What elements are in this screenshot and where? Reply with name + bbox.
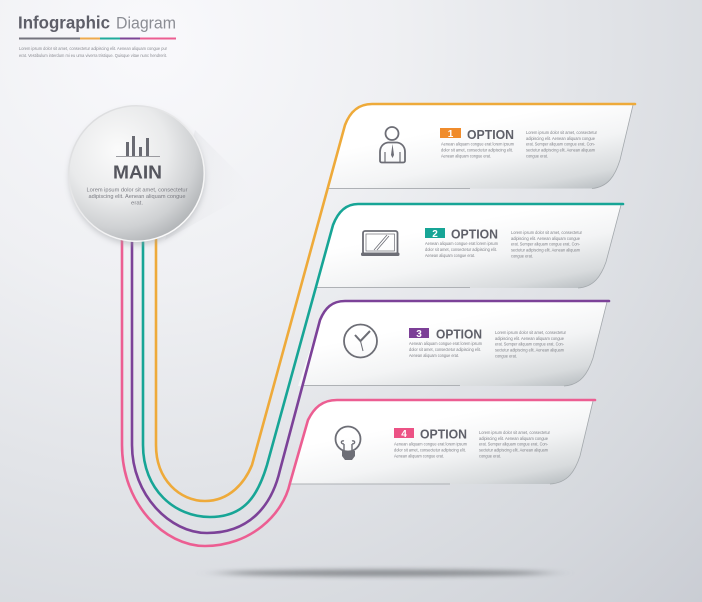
heading light word: Diagram [116,14,176,32]
sphere rim [68,105,205,242]
option 3 right text: Lorem ipsum dolor sit amet, consectetur [495,330,566,335]
badge 3: 3 [416,329,422,340]
option 1 right text: congue erat. [526,154,548,158]
option 4 right text: adipiscing elit. Aenean aliquam congue [479,436,548,441]
badge 2 [425,228,445,240]
badge 4: 4 [401,429,407,440]
connector lines [122,104,635,546]
card 1 [327,104,633,189]
card 3 right edge [564,302,607,386]
badge 3 [409,328,429,340]
option 4 right text [479,430,550,458]
option 3 heading: OPTION [436,326,482,342]
option 4 right text: Lorem ipsum dolor sit amet, consectetur [479,430,550,435]
option 2 left text: Aenean aliquam congue erat lorem ipsum [425,241,498,246]
option 4 left text [394,442,467,458]
main circle [68,105,205,245]
card 4 right edge [550,401,593,484]
option 3 left text: Aenean aliquam congue erat lorem ipsum [409,341,482,346]
option 2 right text [511,230,582,258]
option 1 left text: Aenean aliquam congue erat lorem ipsum [441,142,514,146]
panel: option 2 [314,204,621,288]
sphere [70,106,204,240]
option 4 heading: OPTION [420,426,467,442]
option 1 left text: dolor sit amet, consectetur adipiscing elit. [441,148,513,152]
card 2 [314,204,621,288]
option 2 right text: Lorem ipsum dolor sit amet, consectetur [511,230,582,235]
option 2 right text: adipiscing elit. Aenean aliquam congue [511,236,580,241]
option 3 left text: Aenean aliquam congue erat. [409,353,459,358]
orange connector [156,104,635,501]
icon: person [380,127,405,162]
option 4 left text: Aenean aliquam congue erat. [394,454,444,458]
card 2 base line [316,286,470,288]
teal connector [143,204,623,517]
main description [86,188,188,206]
sphere shadow [69,109,205,245]
purple connector [132,236,609,533]
card 3 [298,301,607,386]
ground shadow [220,570,550,576]
badge 1: 1 [448,129,454,140]
option 1 right text: erat. Semper aliquam congue erat. Con- [526,142,595,147]
option 3 right text: erat. Semper aliquam congue erat. Con- [495,342,564,347]
option 1 right text: Lorem ipsum dolor sit amet, consectetur [526,130,597,135]
long shadow of main circle [165,130,255,240]
card 1 base line [328,188,470,190]
badge 1 [440,128,461,140]
option 1 right text [526,130,597,158]
option 3 right text: congue erat. [495,354,517,358]
title colour rule [19,38,176,40]
option 3 left text: dolor sit amet, consectetur adipiscing elit. [409,347,481,352]
card 4 base line [291,483,450,485]
icon: light bulb [336,426,360,460]
option 4 right text: congue erat. [479,454,501,458]
title block [18,12,176,58]
option 1 heading: OPTION [467,127,514,142]
card 3 base line [303,384,460,386]
option 2 right text: sectetur adipiscing elit. Aenean aliquam [511,247,580,252]
title description: Lorem ipsum dolor sit amet, consectetur adipiscing elit. Aenean aliquam congue pur [19,46,168,51]
option 2 right text: erat. Semper aliquam congue erat. Con- [511,242,580,247]
option 4 right text: sectetur adipiscing elit. Aenean aliquam [479,447,548,452]
option 1 left text [441,142,514,158]
main description: Lorem ipsum dolor sit amet, consectetur [86,188,188,194]
title description [19,46,168,58]
badge 2: 2 [432,229,438,240]
panel: option 4 [289,400,593,484]
badge 4 [394,428,414,440]
option 3 right text: sectetur adipiscing elit. Aenean aliquam [495,347,564,352]
pink connector [122,236,595,546]
option 3 right text: adipiscing elit. Aenean aliquam congue [495,336,564,341]
main description: erat. [131,200,143,206]
title description: erat. Vestibulum interdum mi eu urna viverra tristique. Quisque vitae nunc hendrerit. [19,53,167,58]
panel: option 3 [298,301,607,386]
option 3 left text [409,341,482,358]
option 2 left text [425,241,498,258]
icon: clock [344,324,377,358]
option 1 right text: adipiscing elit. Aenean aliquam congue [526,136,595,141]
option 4 left text: Aenean aliquam congue erat lorem ipsum [394,442,467,446]
option 4 right text: erat. Semper aliquam congue erat. Con- [479,442,548,447]
card 1 right edge [592,105,633,188]
icon: laptop [361,231,400,256]
option 2 right text: congue erat. [511,254,533,258]
heading: Infographic [18,12,110,32]
card 2 right edge [578,205,621,288]
option 1 left text: Aenean aliquam congue erat. [441,154,491,158]
icon: bar chart [116,136,160,157]
main label: MAIN [113,162,162,182]
card 4 [289,400,593,484]
panel: option 1 [327,104,633,189]
option 4 left text: dolor sit amet, consectetur adipiscing elit. [394,448,466,452]
main description: adipiscing elit. Aenean aliquam congue [88,194,186,200]
option 3 right text [495,330,566,358]
option 1 right text: sectetur adipiscing elit. Aenean aliquam [526,147,595,152]
option 2 heading: OPTION [451,226,498,242]
option 2 left text: Aenean aliquam congue erat. [425,253,475,258]
option 2 left text: dolor sit amet, consectetur adipiscing elit. [425,247,497,252]
